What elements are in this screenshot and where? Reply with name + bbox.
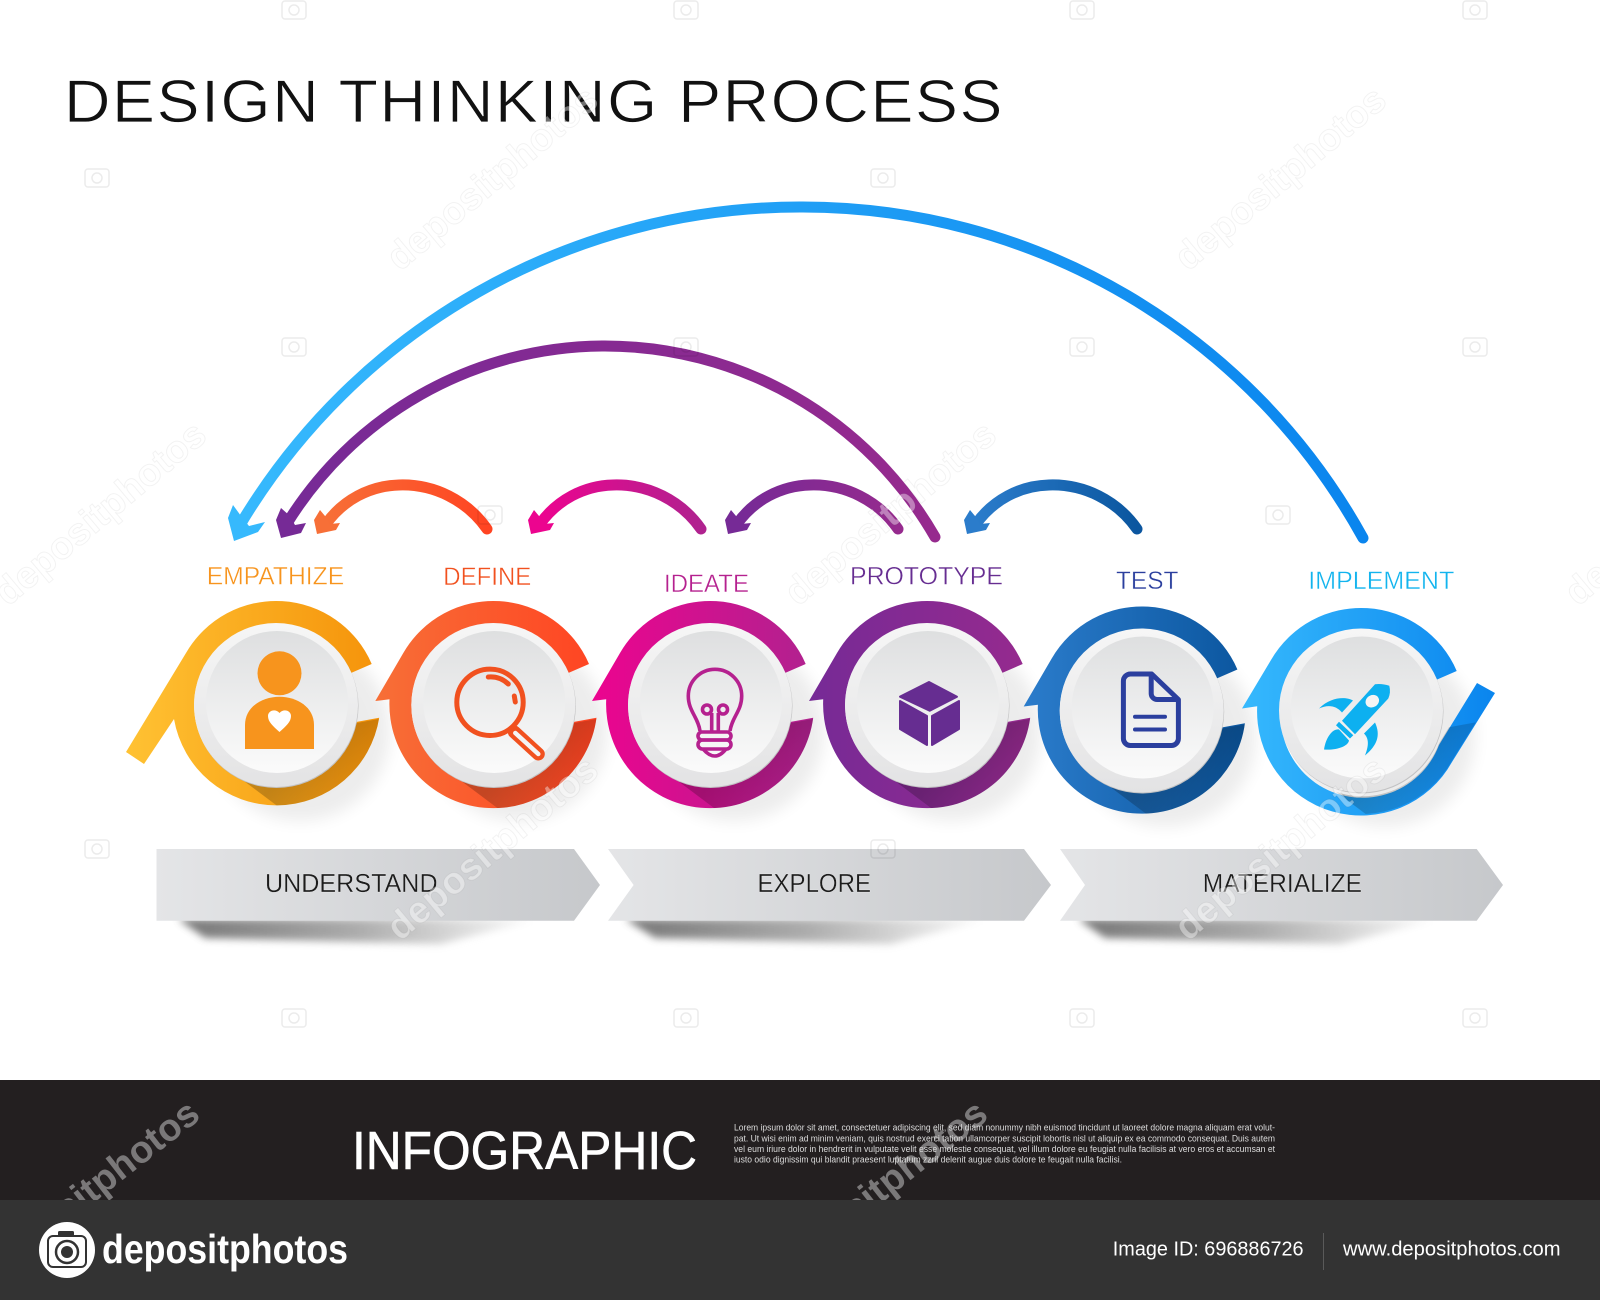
image id: Image ID: 696886726 xyxy=(1113,1238,1304,1260)
step: implement xyxy=(1242,608,1495,826)
step: ideate xyxy=(592,601,835,821)
label: test: TEST xyxy=(1116,567,1178,595)
feedback arrow: prototype to empathize xyxy=(276,346,935,538)
watermarks on dark band: depositphotos xyxy=(763,1092,996,1286)
watermarks on light area xyxy=(0,78,1600,949)
watermarks on light area: depositphotos xyxy=(379,78,606,279)
watermark camera marks on light area xyxy=(85,1,1487,1027)
banner: explore: EXPLORE xyxy=(758,868,871,898)
icon: magnifying glass xyxy=(457,669,538,754)
icon: light bulb xyxy=(688,669,742,756)
footer bar xyxy=(0,1200,1600,1300)
label: empathize: EMPATHIZE xyxy=(207,562,344,590)
logo: camera badge xyxy=(39,1222,95,1278)
lorem ipsum text block: Lorem ipsum dolor sit amet, consectetuer adipiscing elit, sed diam nonummy nibh euismod tincidunt ut laoreet dolore magna aliquam erat volut- xyxy=(734,1123,1275,1133)
banner: materialize xyxy=(1060,849,1503,944)
feedback arrow: ideate to define xyxy=(528,485,701,534)
step: define xyxy=(375,601,618,821)
banner: explore xyxy=(608,849,1051,944)
watermarks on dark band xyxy=(39,1106,986,1276)
step: prototype xyxy=(809,601,1052,821)
feedback arrow: define to empathize xyxy=(314,485,487,534)
label: prototype: PROTOTYPE xyxy=(850,562,1003,590)
icon: document xyxy=(1123,674,1178,746)
step: test xyxy=(1024,606,1267,826)
lorem ipsum text block: vel eum iriure dolor in hendrerit in vulputate velit esse molestie consequat, vel illum dolore eu feugiat nulla facilisis at vero eros et accumsan et xyxy=(734,1144,1275,1154)
icon: person with heart xyxy=(245,651,314,749)
feedback arrow: test to prototype xyxy=(964,485,1137,534)
icon: rocket xyxy=(1319,684,1390,756)
banner: understand: UNDERSTAND xyxy=(265,868,438,898)
feedback arrow: implement to empathize xyxy=(228,207,1363,541)
banner: materialize: MATERIALIZE xyxy=(1203,868,1362,898)
label: ideate: IDEATE xyxy=(664,570,749,598)
website: www.depositphotos.com xyxy=(1342,1238,1561,1260)
icon: cube xyxy=(900,682,959,745)
watermarks on light area: depositphotos xyxy=(777,413,1004,614)
label: implement: IMPLEMENT xyxy=(1308,567,1454,595)
step: empathize xyxy=(126,601,401,821)
divider xyxy=(1323,1233,1324,1270)
label: define: DEFINE xyxy=(443,563,531,591)
infographic footer band xyxy=(0,1080,1600,1200)
title: DESIGN THINKING PROCESS xyxy=(64,68,1004,135)
watermarks on light area: depositphotos xyxy=(1167,78,1394,279)
watermarks on light area: depositphotos xyxy=(1167,748,1394,949)
watermarks on light area: depositphotos xyxy=(379,748,606,949)
infographic heading: INFOGRAPHIC xyxy=(352,1121,697,1181)
logo: wordmark: depositphotos xyxy=(102,1226,348,1272)
lorem ipsum text block: pat. Ut wisi enim ad minim veniam, quis nostrud exerci tation ullamcorper suscipit lobortis nisl ut aliquip ex ea commodo consequat. Duis autem xyxy=(734,1133,1275,1143)
lorem ipsum text block: iusto odio dignissim qui blandit praesent luptatum zzril delenit augue duis dolore te feugait nulla facilisi. xyxy=(734,1155,1122,1165)
banner: understand xyxy=(156,849,600,944)
feedback arrow: prototype to ideate xyxy=(725,485,898,534)
lorem ipsum text block xyxy=(734,1123,1275,1165)
